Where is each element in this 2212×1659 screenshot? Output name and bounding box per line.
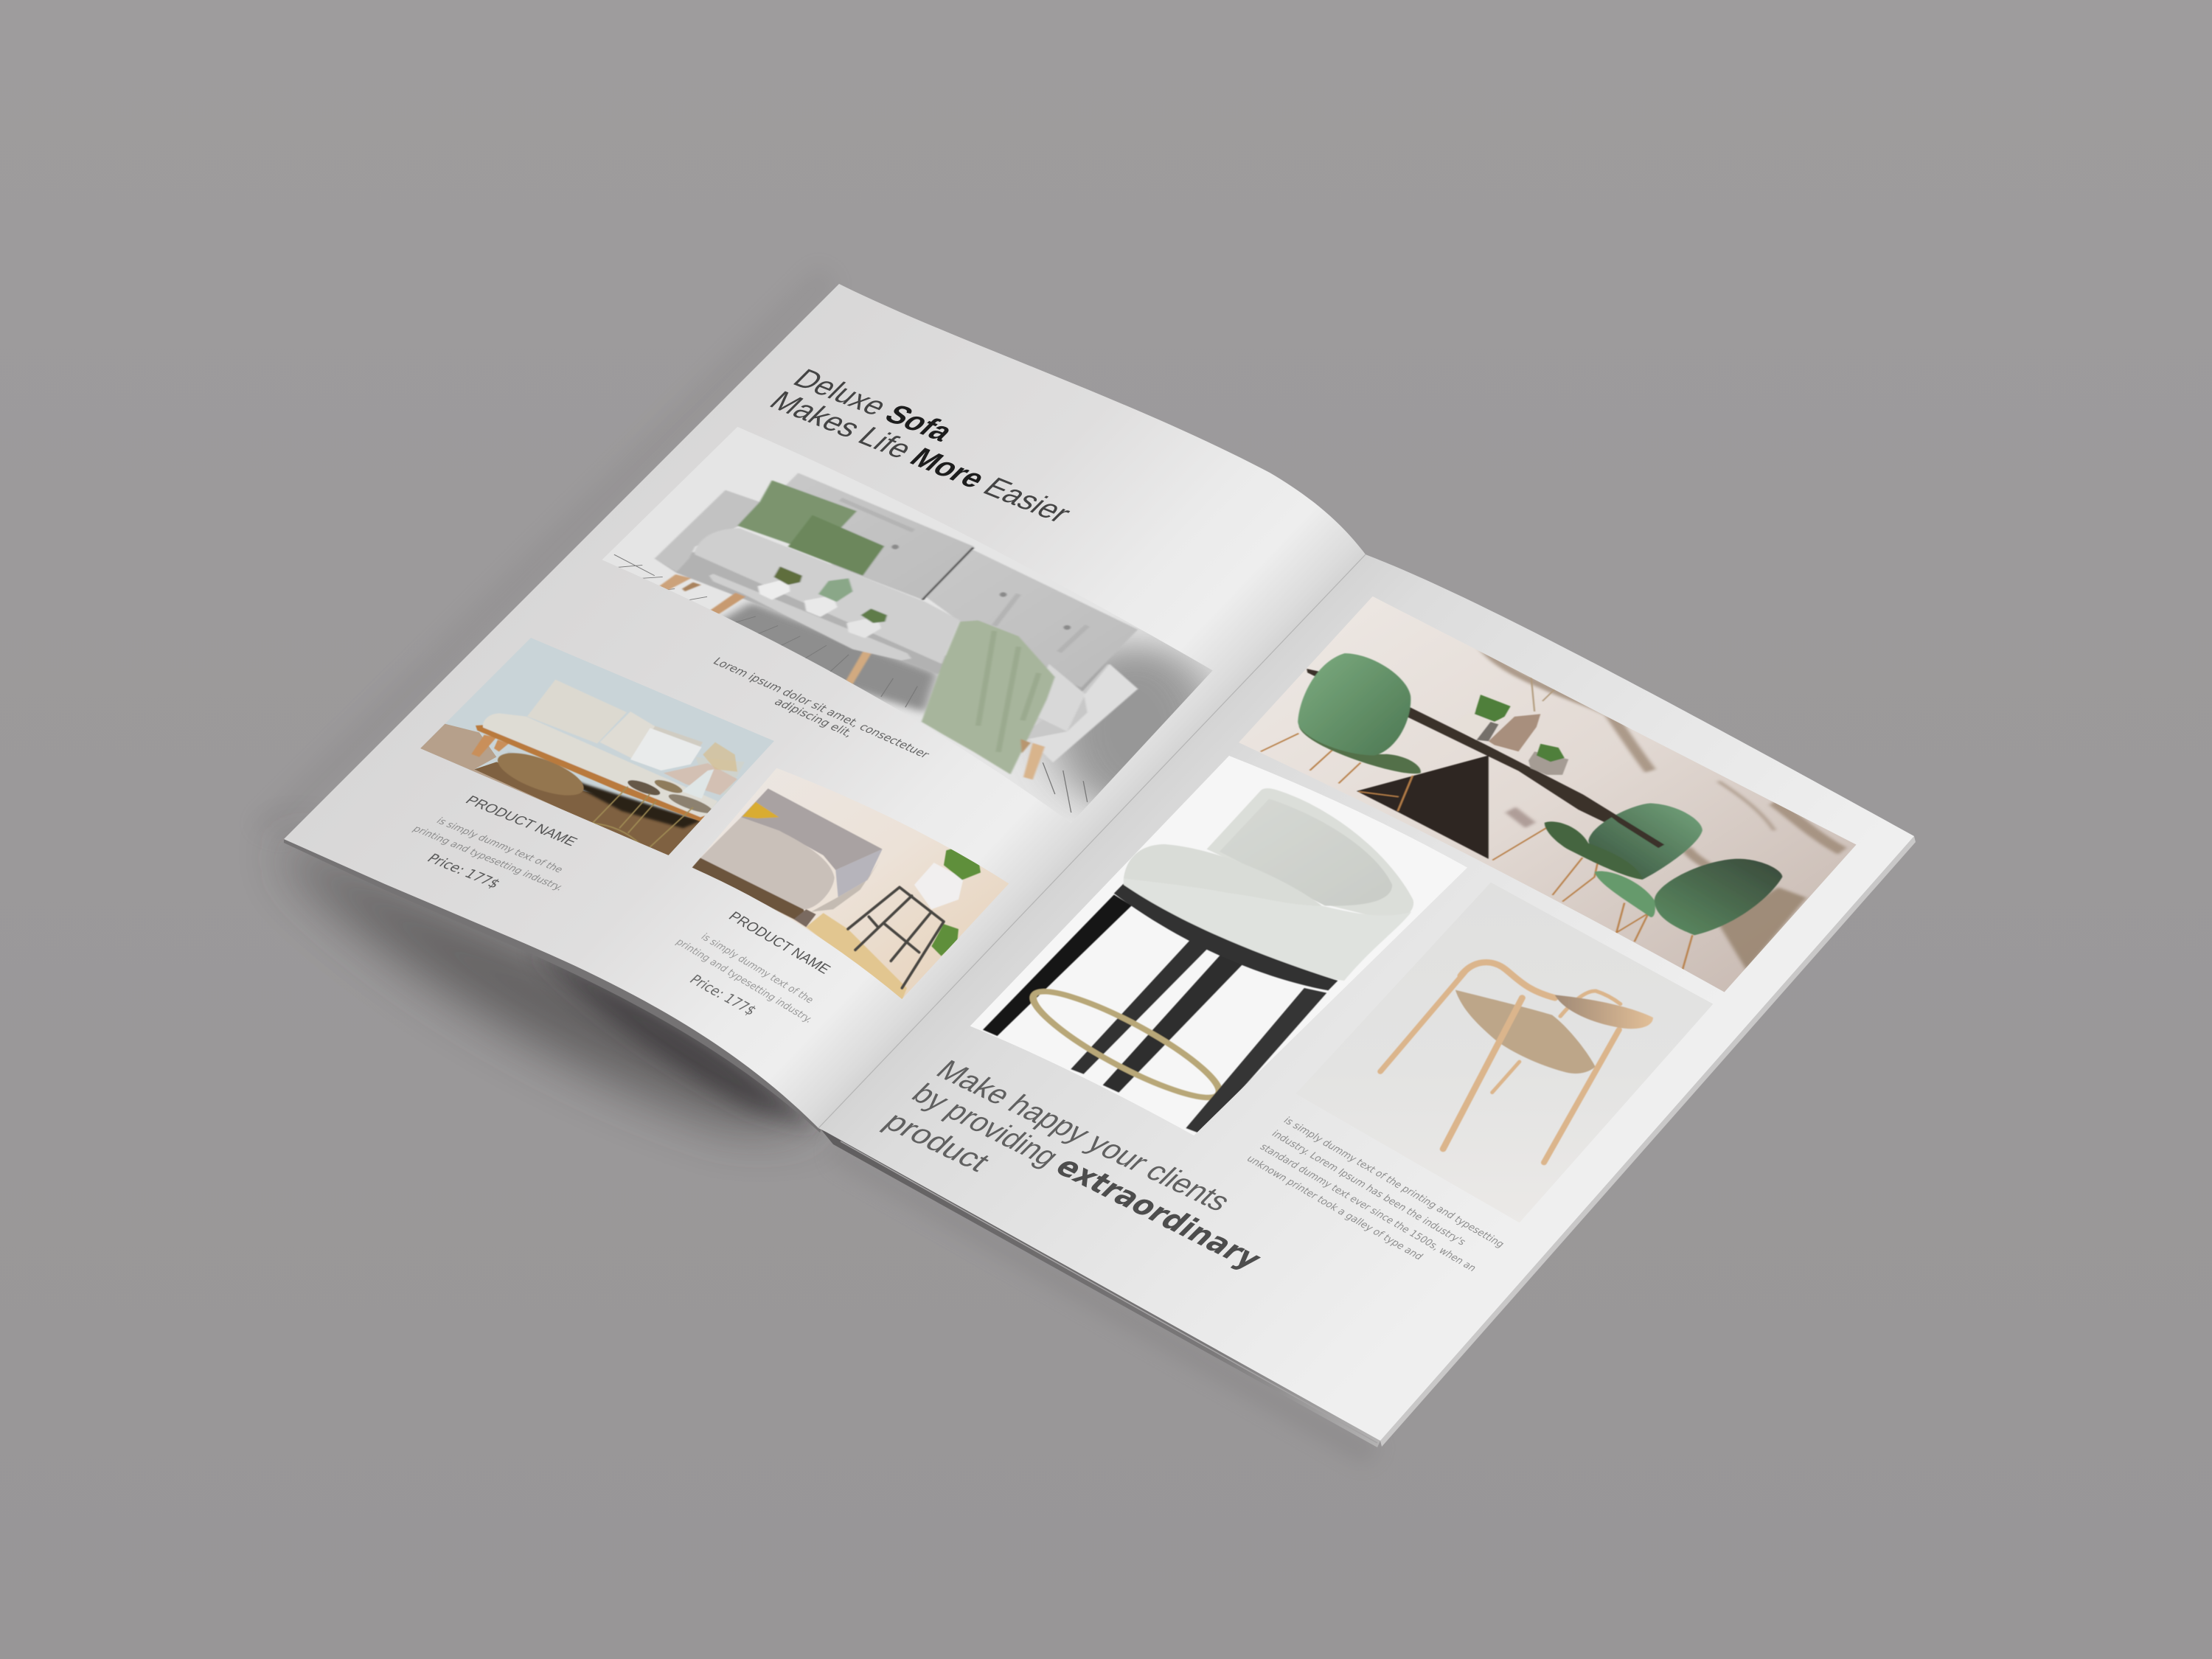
stool legs: [983, 894, 1132, 1036]
product block two: Price: 177$: [686, 972, 760, 1018]
drop shadow under brochure: [251, 265, 1380, 1464]
stool frame: [1114, 883, 1338, 990]
sofa back cushions: [772, 473, 974, 599]
brass ring: [1019, 978, 1234, 1112]
wall right: [695, 757, 745, 794]
floor: [806, 913, 907, 1001]
sofa dark base: [692, 858, 806, 927]
right page content: stool photo: [967, 752, 1475, 1138]
floor: [420, 724, 595, 824]
yellow cushion: [742, 802, 779, 818]
right page body text: is simply dummy text of the printing and typesetting: [1281, 1116, 1506, 1250]
right page: [818, 554, 1914, 1441]
marble veins: [1478, 639, 1843, 874]
sofa base: [655, 552, 950, 675]
left page content: sofa photo: [602, 427, 1212, 813]
green chair three: [1616, 902, 1692, 970]
product block two: printing and typesetting industry.: [673, 937, 815, 1025]
sofa caption: Lorem ipsum dolor sit amet, consectetuer: [710, 655, 933, 761]
cushions: [527, 680, 627, 743]
right page body text: industry. Lorem Ipsum has been the industry's: [1269, 1129, 1468, 1248]
right page heading: by providing extraordinary: [904, 1078, 1270, 1276]
sofa base: [476, 725, 706, 821]
stool back: [1207, 788, 1413, 922]
green chair one: [1261, 734, 1413, 811]
green chair two: [1492, 828, 1599, 902]
right page body text: standard dummy text ever since the 1500s, when an: [1257, 1142, 1478, 1273]
rug: [474, 762, 700, 855]
product block one: is simply dummy text of the: [434, 816, 566, 875]
left page: [284, 284, 1366, 1128]
right page content: dining photo: [1235, 593, 1863, 996]
seat side: [1124, 879, 1411, 981]
sofa seat: [700, 817, 835, 909]
seat: [1455, 990, 1596, 1074]
sofa caption: adipiscing elit,: [771, 695, 857, 740]
sofa legs: [471, 735, 496, 757]
floor: [707, 602, 938, 712]
right arm: [1029, 664, 1138, 762]
sofa legs: [659, 574, 692, 590]
pillows: [737, 480, 857, 544]
plants: [944, 846, 981, 880]
sofa left arm: [655, 490, 759, 571]
blanket: [922, 620, 1055, 774]
seat cushion: [1124, 844, 1322, 905]
backrest: [1555, 995, 1653, 1029]
left page heading: Deluxe Sofa: [786, 364, 961, 448]
product block one: printing and typesetting industry.: [410, 824, 566, 893]
spine crease: [818, 554, 1366, 1128]
product block one: PRODUCT NAME: [462, 793, 580, 849]
right page body text: unknown printer took a galley of type and: [1244, 1154, 1425, 1262]
product block two: [673, 909, 833, 1025]
planter: [914, 863, 964, 909]
pots and vase: [1450, 710, 1498, 740]
frame: [1380, 972, 1465, 1071]
coffee table: [709, 574, 911, 661]
panel shading: [1051, 644, 1221, 813]
stool: [848, 887, 944, 988]
product block one: Price: 177$: [423, 851, 504, 891]
side tables: [653, 777, 684, 796]
left page content: photo two: [688, 765, 1012, 1003]
left page content: photo one: [418, 636, 779, 858]
back leg: [1492, 1062, 1520, 1093]
brochure page stack edges: [284, 836, 1916, 1447]
blanket: [664, 763, 737, 795]
plant pots: [758, 578, 790, 600]
product block one: [410, 793, 580, 893]
right page content: wood chair photo: [1293, 880, 1716, 1224]
floor boards: [598, 554, 1088, 813]
sofa back: [741, 788, 883, 870]
vase and flowers: [703, 742, 737, 772]
sofa seat: [695, 528, 960, 664]
marble corner: [1719, 887, 1806, 970]
shadow under sofa: [507, 752, 700, 828]
pyramid base: [1357, 756, 1489, 859]
right page heading: Make happy your clients: [929, 1054, 1238, 1217]
pouf: [493, 744, 588, 804]
table: [1307, 669, 1664, 848]
product block two: PRODUCT NAME: [725, 909, 833, 977]
sofa seat: [483, 713, 717, 817]
right page heading: product: [877, 1106, 997, 1178]
left page heading: Makes Life More Easier: [762, 386, 1079, 529]
product block two: is simply dummy text of the: [698, 932, 816, 1006]
